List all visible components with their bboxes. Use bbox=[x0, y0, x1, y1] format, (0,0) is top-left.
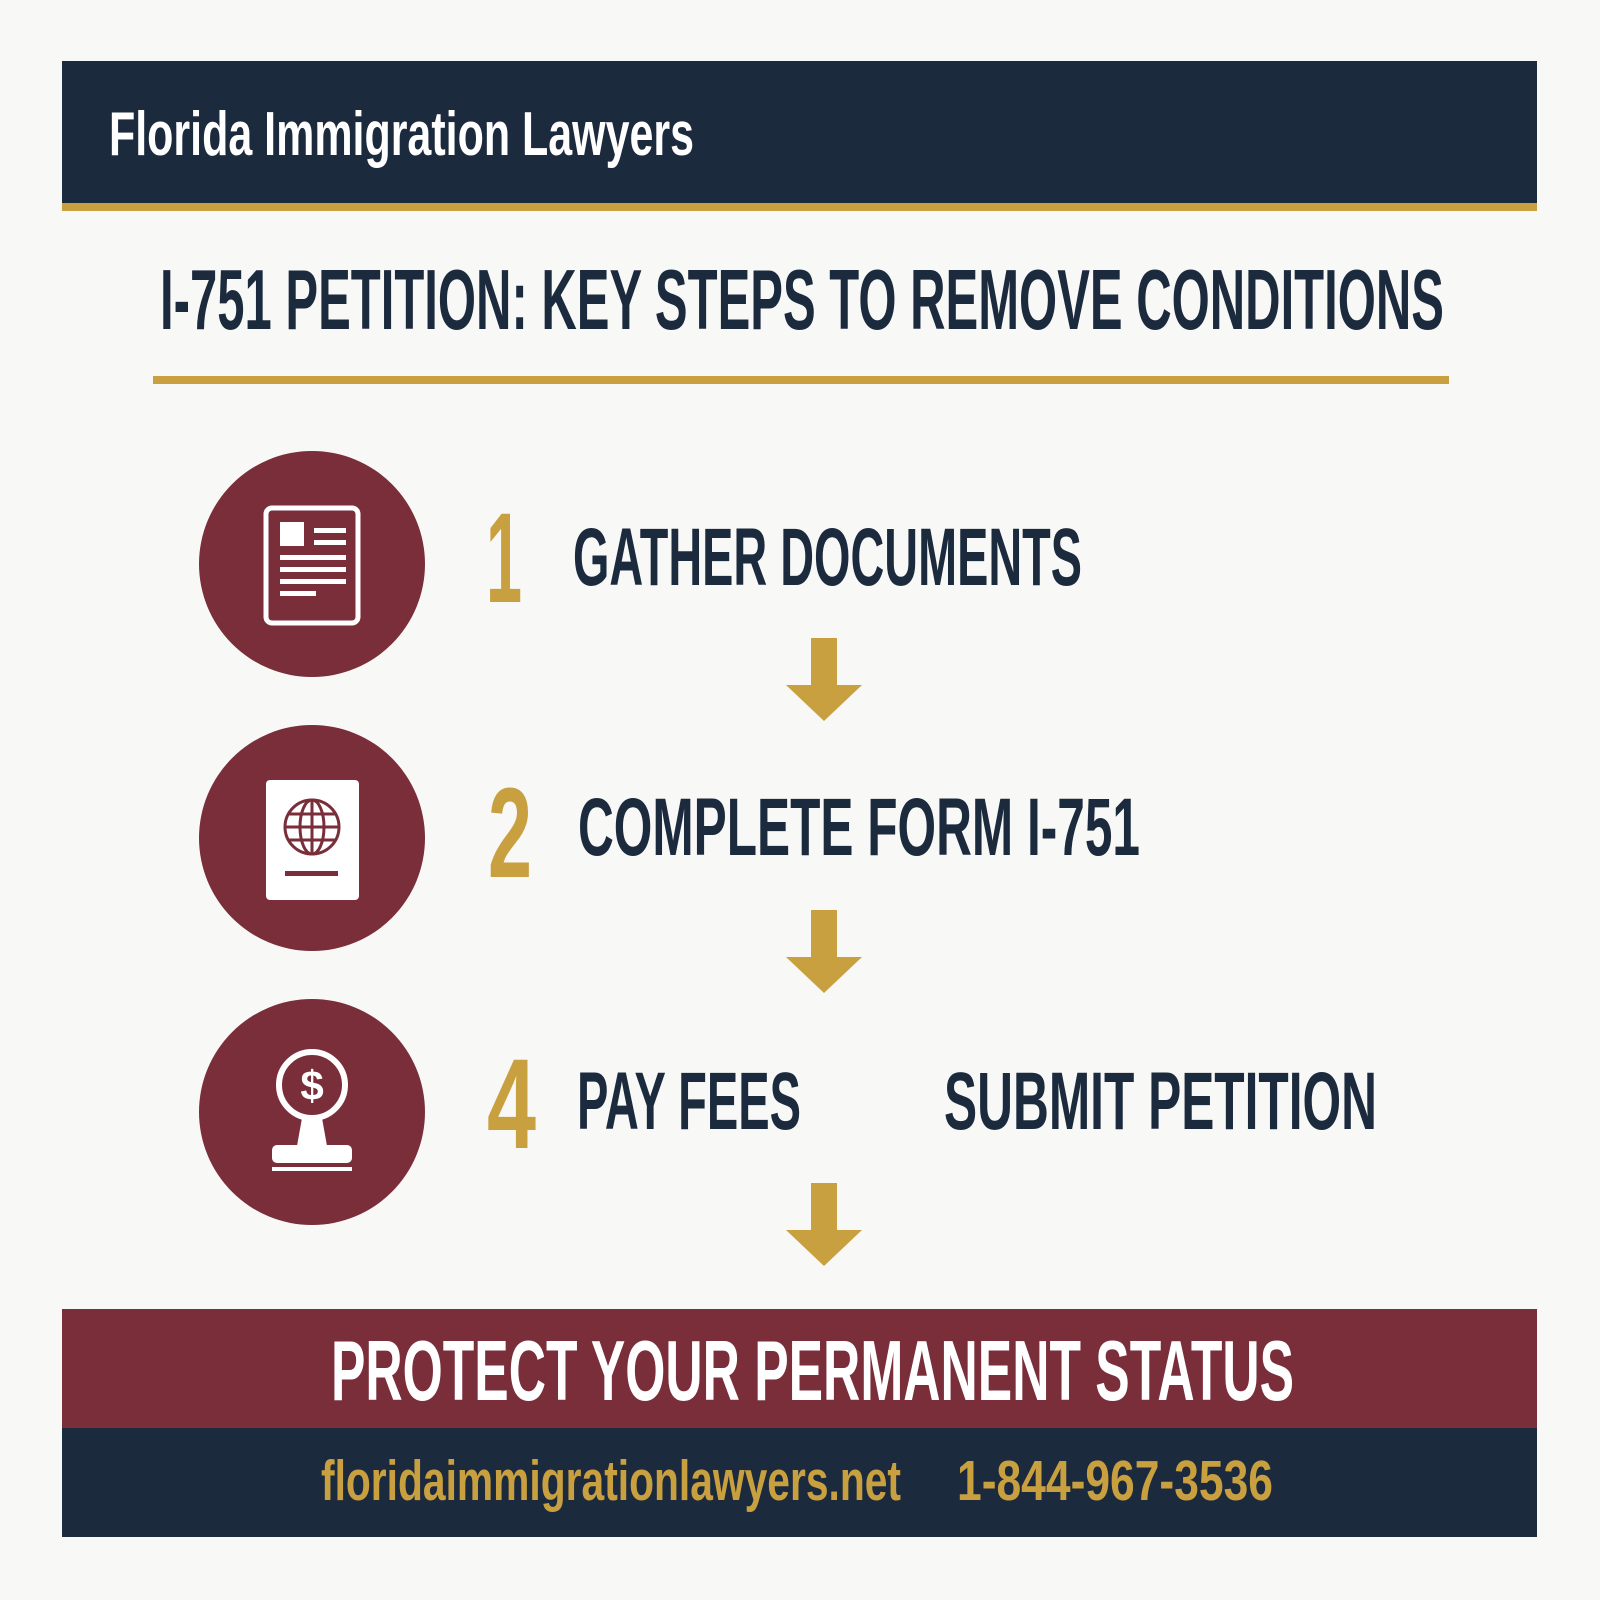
header bar bbox=[62, 61, 1537, 211]
icon: passport bbox=[199, 725, 425, 951]
step label: GATHER DOCUMENTS bbox=[573, 512, 1082, 603]
icon: fee stamp: $ bbox=[300, 1062, 324, 1109]
header text: Florida Immigration Lawyers bbox=[109, 100, 694, 169]
step 2 bbox=[199, 725, 1140, 951]
arrow 1 bbox=[786, 638, 862, 721]
arrow 2 bbox=[786, 910, 862, 993]
arrow 3 bbox=[786, 1183, 862, 1266]
step label: COMPLETE FORM I-751 bbox=[578, 782, 1140, 873]
icon: document bbox=[199, 451, 425, 677]
website: floridaimmigrationlawyers.net bbox=[321, 1449, 901, 1513]
number 1: 1 bbox=[486, 487, 522, 630]
icon: fee stamp bbox=[199, 999, 425, 1225]
number 4: 4 bbox=[487, 1033, 536, 1176]
number 2: 2 bbox=[488, 762, 532, 905]
step 3 bbox=[199, 999, 1377, 1225]
step label: pay fees: PAY FEES bbox=[577, 1056, 801, 1147]
footer bbox=[62, 1428, 1537, 1537]
banner: protect bbox=[62, 1309, 1537, 1429]
step 1 bbox=[199, 451, 1082, 677]
phone: 1-844-967-3536 bbox=[957, 1449, 1273, 1513]
